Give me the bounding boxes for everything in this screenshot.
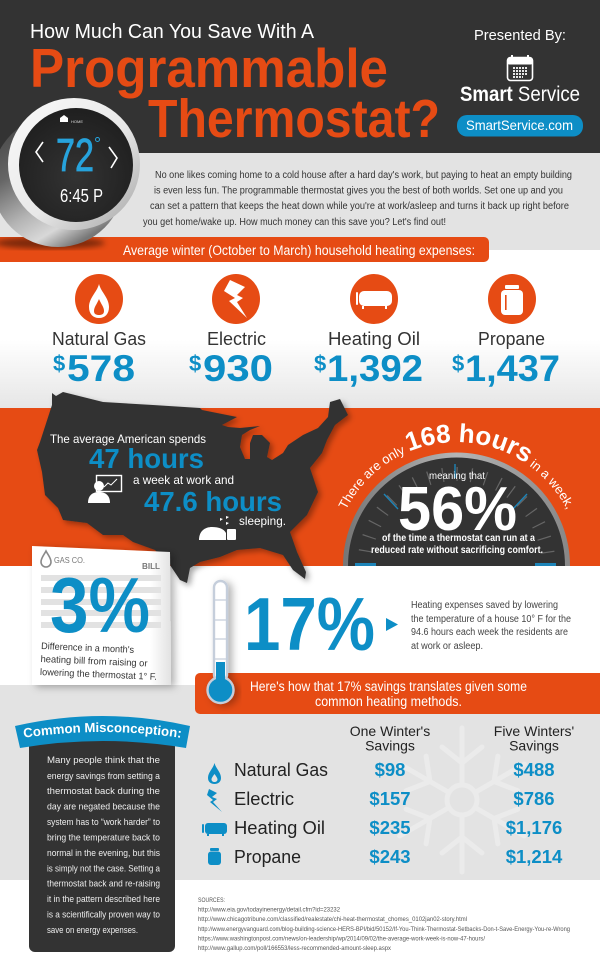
intro paragraph: No one likes coming home to a cold house after a hard day's work, but paying to heat an empty building: [155, 170, 572, 181]
icon: blue jar: [208, 848, 221, 865]
one winter values: [369, 759, 411, 867]
misconception body text: save on energy expenses.: [47, 925, 138, 936]
ribbon heading: Common Misconception:: [24, 722, 181, 738]
intro paragraph: [143, 170, 572, 228]
utility bill card: [32, 546, 171, 685]
one winter values: $235: [369, 817, 411, 838]
snowflake background: [390, 728, 534, 872]
icon: blue tank: [202, 823, 227, 836]
ribbon heading: [15, 716, 190, 748]
row labels: Natural Gas: [234, 760, 328, 780]
banner: average heating expenses: [0, 237, 489, 262]
sources: http://www.gallup.com/poll/166553/less-recommended-amount-sleep.aspx: [198, 946, 391, 952]
heating type: natural gas: Natural Gas: [52, 329, 146, 349]
stat: 17 percent: Heating expenses saved by lowering: [411, 600, 558, 611]
heating type: electric: $: [189, 351, 201, 376]
text: American work and sleep hours: a week at work and: [133, 473, 234, 487]
one winter values: $157: [369, 788, 411, 809]
thermometer: [208, 581, 234, 703]
row labels: Electric: [234, 789, 294, 809]
title: [30, 21, 440, 149]
heating type: propane: $: [452, 351, 464, 376]
banner: average heating expenses: Average winter (October to March) household heating expenses:: [123, 243, 475, 258]
arrow: [386, 618, 398, 631]
row labels: Propane: [234, 847, 301, 867]
utility bill card: lowering the thermostat 1° F.: [40, 667, 157, 683]
thermostat illustration: HOME: [71, 119, 83, 124]
row labels: Heating Oil: [234, 818, 325, 838]
thermostat illustration: [0, 98, 140, 249]
misconception body text: is a scientifically proven way to: [47, 910, 160, 920]
heating type: heating oil: [314, 274, 423, 389]
stat: 17 percent: the temperature of a house 10° F for the: [411, 614, 571, 625]
icon: calendar: [508, 55, 532, 80]
heating type: propane: 1,437: [465, 348, 560, 389]
sources: http://www.energyvanguard.com/blog-building-science-HERS-BPI/bid/50152/If-You-Think-Thermostat-Setbacks-Don-t-Save-Energy-You-re-Wrong: [198, 927, 570, 933]
panel: common misconception: [15, 716, 190, 952]
five winters values: $1,176: [506, 817, 562, 838]
five winters values: $1,214: [506, 846, 563, 867]
text: 56 percent callout: of the time a thermostat can run at a: [382, 532, 535, 544]
icon: home: [60, 115, 68, 122]
title: Thermostat?: [148, 89, 440, 149]
presenter logo block: Smart Service: [460, 83, 580, 106]
text: 56 percent callout: 56%: [398, 475, 517, 544]
heating type: electric: [189, 274, 273, 389]
thermostat illustration: 72: [56, 129, 94, 181]
one winter values: $243: [369, 846, 411, 867]
misconception body text: system has to “work harder” to: [47, 817, 160, 828]
icon: blue flame: [208, 763, 221, 784]
savings table: [202, 723, 574, 867]
intro paragraph: can set a pattern that keeps the heat down while you're at work/asleep and turns it back up right before: [150, 201, 569, 212]
stat: 17 percent: [244, 582, 571, 666]
sources: https://www.washingtonpost.com/news/on-leadership/wp/2014/09/02/the-average-work-week-is-now-47-hours/: [198, 936, 485, 942]
heating type: propane: [452, 274, 560, 389]
banner: savings translation: common heating methods.: [315, 694, 462, 709]
intro paragraph: you get home/wake up. How much money can this save you? Let's find out!: [143, 217, 446, 228]
misconception body text: is simply not the case. Setting a: [47, 864, 161, 874]
heating type: natural gas: $: [53, 351, 65, 376]
five winters values: [506, 759, 563, 867]
text: American work and sleep hours: The average American spends: [50, 432, 206, 446]
icon: gas drop: [41, 551, 51, 567]
heating type: heating oil: $: [314, 351, 326, 376]
heating type: electric: 930: [203, 348, 273, 389]
utility bill card: heating bill from raising or: [40, 654, 148, 669]
heating type: heating oil: 1,392: [327, 348, 423, 389]
five winters values: $786: [513, 788, 555, 809]
heating type: natural gas: 578: [67, 348, 135, 389]
thermostat illustration: 6:45 P: [60, 186, 103, 206]
column headers: [350, 723, 574, 754]
sources: SOURCES:: [198, 898, 225, 904]
text: 56 percent callout: meaning that: [429, 470, 485, 482]
heating type: propane: Propane: [478, 329, 545, 349]
misconception body text: Many people think that the: [47, 755, 160, 766]
banner: savings translation: [195, 673, 600, 714]
text: 168 hours in a week: There are only 168 hours in a week,: [338, 423, 572, 510]
sources: [198, 898, 570, 952]
utility bill card: Difference in a month's: [41, 641, 134, 656]
title: Programmable: [30, 37, 388, 99]
column headers: Savings: [509, 738, 559, 754]
text: 56 percent callout: reduced rate without sacrificing comfort.: [371, 544, 543, 556]
text: American work and sleep hours: 47.6 hours: [144, 486, 282, 517]
icon: presenter: [88, 476, 122, 503]
sources: http://www.chicagotribune.com/classified/realestate/chi-heat-thermostat_chomes_0102jan02-story.html: [198, 917, 467, 923]
misconception body text: thermostat back during the: [47, 786, 160, 797]
icon: propane jar: [501, 285, 523, 315]
button: website: SmartService.com: [466, 117, 573, 133]
misconception body text: thermostat back and re-raising: [47, 878, 160, 890]
heating type: electric: Electric: [207, 329, 266, 349]
stat: 17 percent: 94.6 hours each week the residents are: [411, 627, 568, 638]
column headers: Savings: [365, 738, 415, 754]
utility bill card: GAS CO.: [54, 556, 85, 565]
misconception body text: [47, 755, 161, 936]
misconception body text: energy savings from setting a: [47, 771, 161, 782]
misconception body text: it in the pattern described here: [47, 894, 160, 905]
icon: flame: [89, 284, 109, 318]
misconception body text: day are negated because the: [47, 802, 160, 812]
misconception body text: normal in the evening, but this: [47, 848, 160, 859]
sources: http://www.eia.gov/todayinenergy/detail.cfm?id=23232: [198, 908, 341, 914]
heating type: natural gas: [52, 274, 146, 389]
intro paragraph: is even less fun. The programmable thermostat gives you the best of both worlds. Set one up and you: [154, 186, 563, 196]
stat: 17 percent: 17%: [244, 582, 375, 666]
map of the United States: [37, 392, 348, 583]
text: American work and sleep hours: 47 hours: [89, 443, 204, 474]
stat: 17 percent: at work or asleep.: [411, 641, 483, 652]
utility bill card: 3%: [50, 561, 150, 649]
utility bill card: BILL: [142, 562, 160, 571]
icon: blue bolt: [207, 789, 222, 812]
icon: oil tank: [356, 291, 392, 309]
thermostat gauge: [343, 452, 570, 566]
column headers: Five Winters': [494, 723, 574, 739]
misconception body text: bring the temperature back to: [47, 832, 160, 844]
title: How Much Can You Save With A: [30, 21, 315, 43]
text: American work and sleep hours: [50, 432, 286, 540]
icon: lightning bolt: [224, 280, 247, 318]
column headers: One Winter's: [350, 723, 430, 739]
one winter values: $98: [375, 759, 405, 780]
presenter logo block: Presented By:: [474, 27, 566, 44]
text: American work and sleep hours: sleeping.: [239, 514, 286, 528]
presenter logo block: [457, 27, 583, 136]
icon: sleeper in bed: [199, 516, 236, 540]
banner: savings translation: Here's how that 17% savings translates given some: [250, 679, 527, 694]
five winters values: $488: [513, 759, 555, 780]
heating type: heating oil: Heating Oil: [328, 329, 420, 349]
text: 56 percent callout: [371, 470, 543, 556]
row labels: [234, 760, 328, 867]
